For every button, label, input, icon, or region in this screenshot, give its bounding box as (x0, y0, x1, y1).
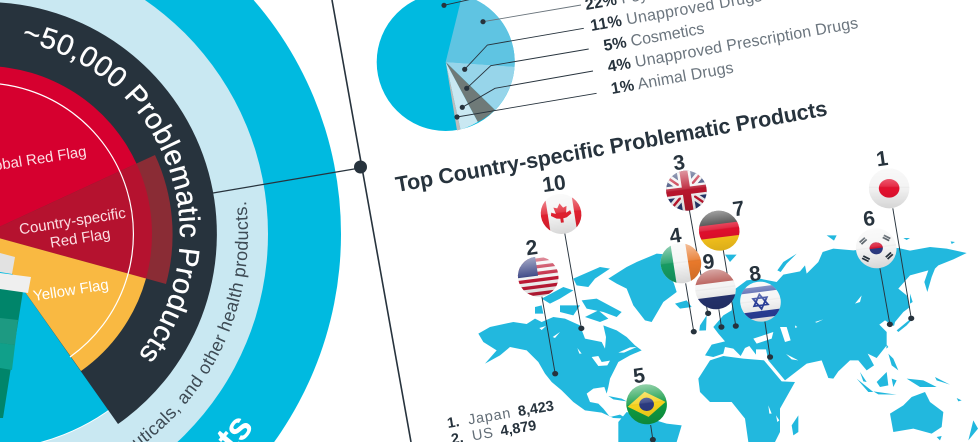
white arc (0, 83, 133, 357)
rank numbers: 4 (668, 224, 683, 248)
rank numbers: 6 (862, 207, 876, 231)
flag: Netherlands (696, 269, 736, 310)
rank numbers: 10 (541, 171, 567, 197)
flag: USA (518, 256, 558, 297)
yellow flag sector (0, 234, 146, 371)
pie legend (584, 0, 859, 98)
SE Asia islands (857, 345, 950, 395)
heading: ~50,000 problematic products: ~50,000 Problematic Products (24, 27, 201, 362)
flag: South Korea (856, 234, 897, 268)
rank numbers: 2 (524, 236, 539, 260)
flag: Canada (540, 198, 582, 234)
inland seas (753, 295, 862, 422)
Australia (890, 392, 943, 434)
dark sector: problematic products (0, 2, 217, 424)
connector line with node (213, 0, 411, 442)
arctic islets (725, 235, 955, 262)
map pins and flags (513, 166, 914, 442)
inner disc (0, 18, 200, 442)
rank numbers (524, 147, 890, 388)
red sector: global red flag (0, 66, 136, 234)
label: country-specific red flag: Country-specific (18, 205, 127, 238)
panel: concentric product circle (0, 0, 341, 442)
rank numbers: 8 (748, 262, 763, 286)
North America (478, 317, 642, 419)
flag: Japan (869, 175, 910, 208)
flag: UK (666, 170, 707, 211)
label: yellow flag: Yellow Flag (32, 276, 110, 305)
Eurasia (705, 247, 967, 380)
flag: Israel (740, 282, 781, 322)
rank numbers: 7 (731, 197, 746, 221)
rank 1: 1. Japan 8,423 (446, 398, 555, 432)
map west: Americas and Greenland (478, 254, 692, 442)
map east: Old World and Oceania (698, 235, 978, 442)
flag: Brazil (626, 384, 667, 424)
ranking list (446, 398, 555, 442)
flag: Germany (698, 210, 740, 251)
pin lines (542, 208, 914, 442)
heading: top country-specific problematic products: Top Country-specific Problematic Products (394, 96, 829, 197)
legend: 5%: 5% Cosmetics (602, 20, 706, 55)
pie leader lines (441, 0, 597, 120)
Tasmania and New Zealand (937, 398, 978, 440)
Africa (698, 356, 795, 442)
rank numbers: 3 (672, 151, 686, 175)
rank numbers: 5 (632, 364, 647, 388)
Greenland (608, 254, 687, 322)
world map (478, 235, 978, 442)
Caribbean islands (608, 396, 627, 401)
flag: Ireland (660, 244, 702, 284)
Arctic islands (535, 267, 622, 322)
light ring (0, 0, 268, 442)
country-specific red flag sector (0, 164, 152, 278)
country-specific extension (0, 155, 173, 284)
rank numbers: 1 (875, 147, 890, 171)
lakes and bays (539, 326, 637, 366)
legend: 1%: 1% Animal Drugs (610, 60, 735, 98)
pie chart: problematic product types (377, 0, 515, 131)
icon: pill bottle (0, 253, 31, 418)
Madagascar (792, 415, 798, 435)
label: country-specific red flag: Red Flag (49, 225, 112, 252)
UK (699, 315, 707, 331)
outer ring: all health products (0, 0, 341, 442)
South America (618, 412, 682, 442)
Japan (897, 294, 913, 332)
Iceland (675, 300, 692, 309)
legend: 4%: 4% Unapproved Prescription Drugs (606, 15, 859, 76)
Novaya Zemlya (777, 254, 797, 272)
rank numbers: 9 (701, 250, 716, 274)
